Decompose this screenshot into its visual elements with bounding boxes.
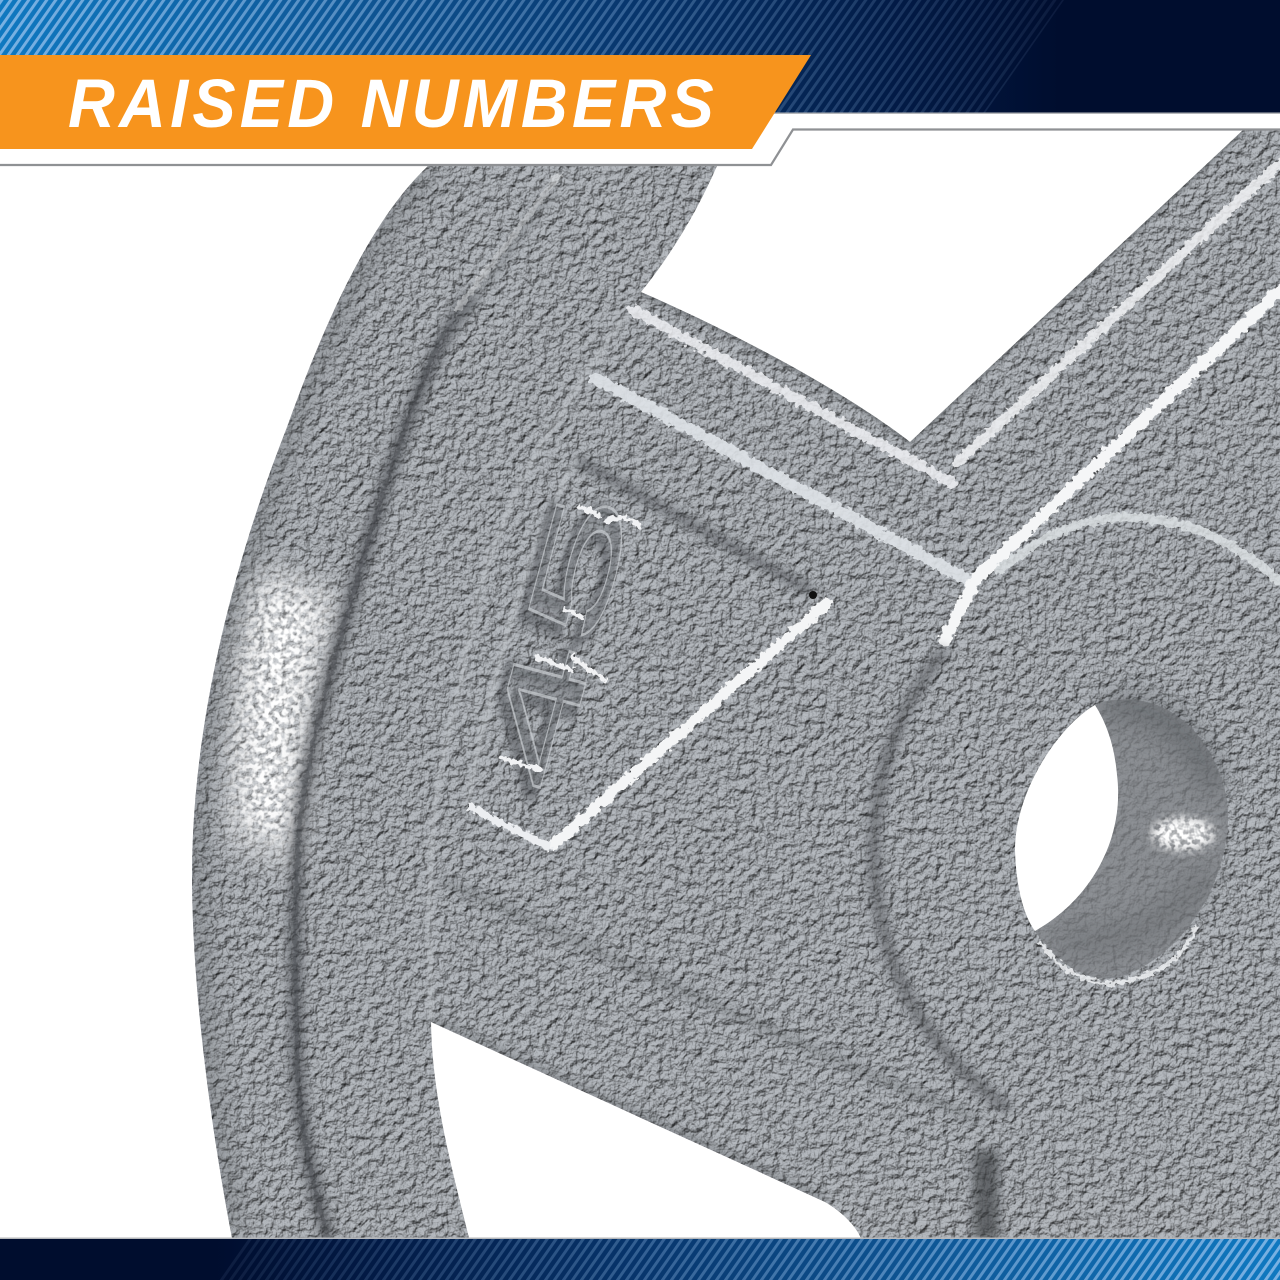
weight plate photo illustration bbox=[192, 130, 1280, 1238]
footer blue band bbox=[0, 1238, 1280, 1280]
spoke highlight lines bbox=[595, 163, 1280, 640]
title: RAISED NUMBERS bbox=[68, 65, 714, 142]
inner ring ridge bbox=[430, 313, 627, 1022]
plate textured metal surface bbox=[192, 130, 1280, 1238]
lower spoke crease bbox=[440, 880, 980, 1120]
ring specular highlight bbox=[226, 560, 345, 880]
ring groove bbox=[295, 174, 559, 1238]
hub hole inner wall bbox=[1035, 699, 1228, 983]
header panel outline bbox=[0, 130, 1280, 165]
header blue band bbox=[0, 0, 1280, 114]
plate outer edge shading bbox=[192, 130, 1243, 1238]
recessed triangular number panel bbox=[468, 457, 830, 848]
header white panel bbox=[0, 0, 1280, 165]
hub hole opening bbox=[1015, 705, 1118, 931]
hub groove bbox=[874, 650, 1010, 1110]
raised number 45: 45 bbox=[461, 477, 657, 804]
title banner bbox=[0, 55, 811, 149]
bottom dark seam bbox=[973, 1150, 999, 1240]
raised number 45: 45 bbox=[455, 482, 651, 809]
